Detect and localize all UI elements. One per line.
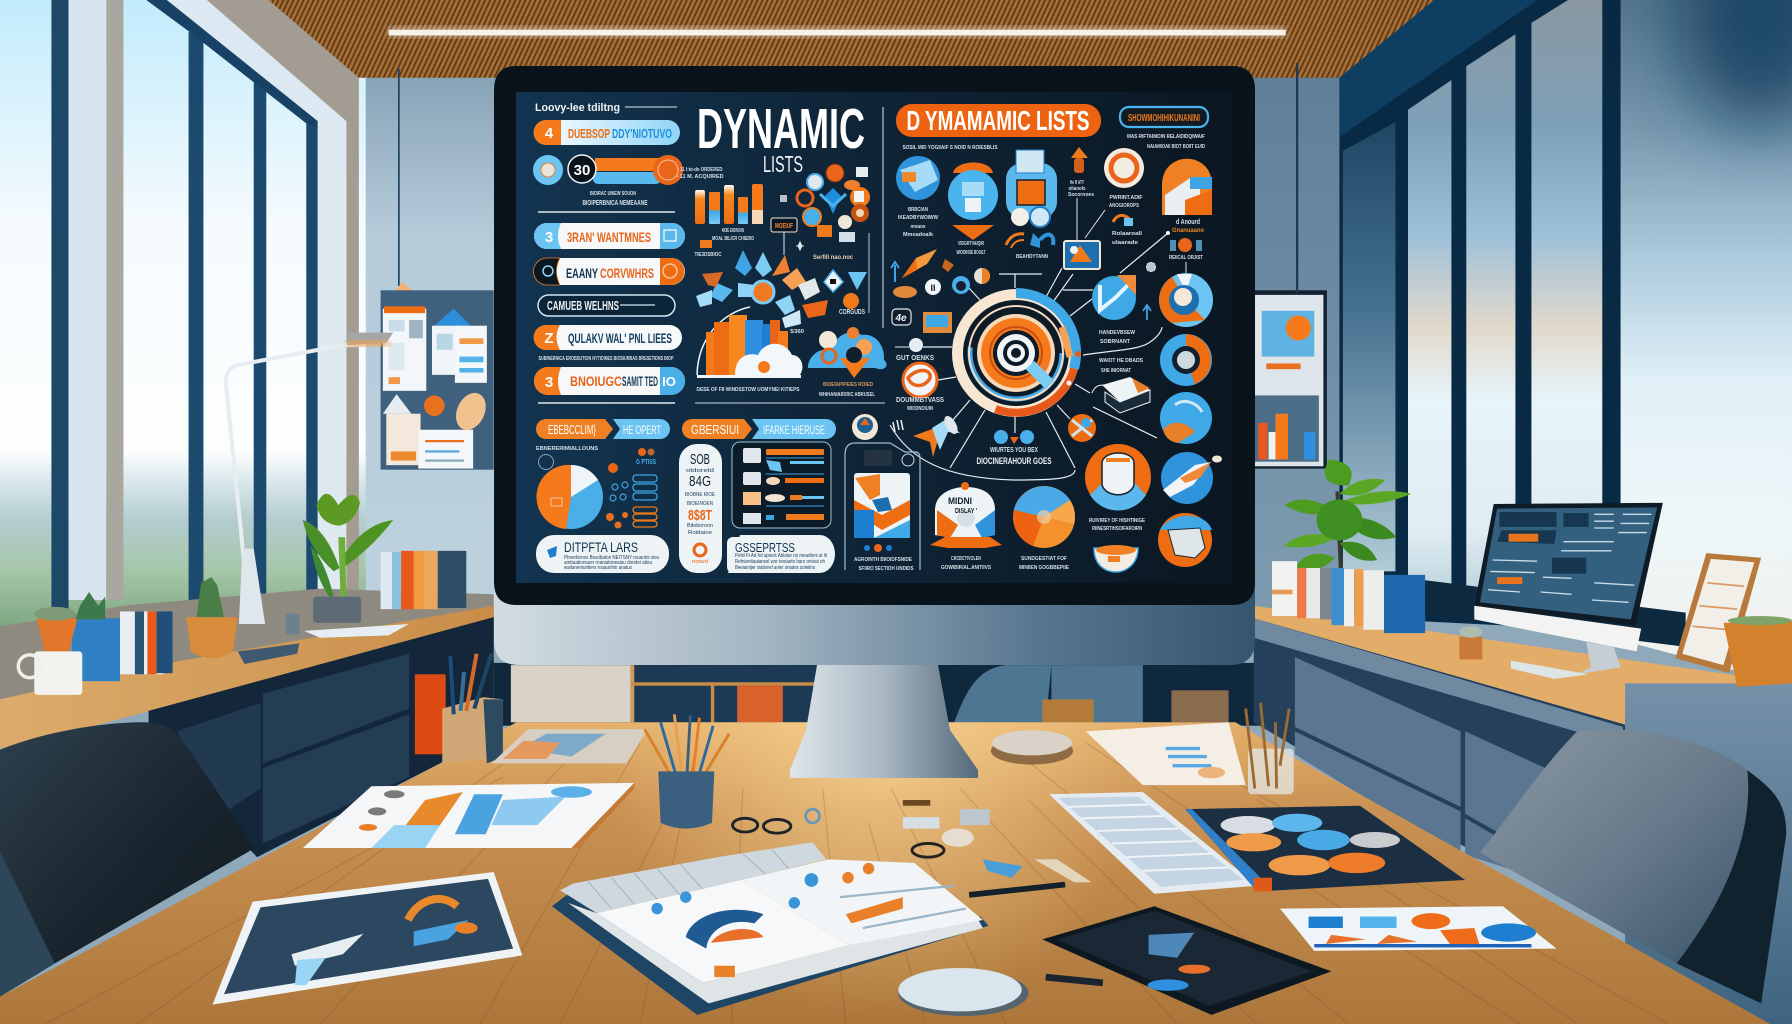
globe badge: moaos (910, 224, 926, 230)
target caption (976, 430, 1052, 466)
desk lamp (226, 333, 393, 624)
lower right paper (1280, 906, 1557, 951)
white orange badge: Rolaaroall (1112, 231, 1143, 237)
mini bar chart: MOIE ENDROUN (722, 228, 744, 234)
MIDNI card: GOWIBIRIAL.ANITIIVS (941, 565, 991, 571)
white orange badge: PWRINT.ADIF (1110, 195, 1143, 201)
orange up arrow callout: olianols (1068, 186, 1086, 192)
outlined list item: CAMUEB WELHNS (547, 298, 619, 313)
tall stats pill: BIOEINOEN (687, 501, 713, 507)
pie legend icons: G PTISS (636, 459, 656, 466)
ceiling light (389, 26, 1286, 38)
white orange badge: ulaarade (1112, 240, 1138, 246)
blue ornament badge: VIDGRTVAIQIR (958, 241, 984, 247)
printer caption (1099, 358, 1143, 374)
lower-left small icons of right section: 4e (894, 313, 907, 324)
list item 4: CORVWHRS (600, 265, 654, 281)
monitor stand (790, 665, 978, 778)
gem chain illustration: CORGUDS (839, 309, 865, 316)
cloud cluster: WHIHANIARIOIIC ABRUSEL (819, 392, 875, 398)
tall stats pill: oldoreld (686, 468, 714, 474)
MIDNI card: CRCBCTIVOLEN (951, 556, 981, 562)
blue stylised badge (1092, 275, 1136, 345)
bottom-left tablet (213, 872, 522, 1005)
tag caption: NAIAMIOAII BIOT BOIIT EUID (1147, 144, 1205, 150)
small potted plant right (1459, 626, 1482, 659)
left cabinets (149, 617, 494, 857)
sign post (771, 195, 797, 255)
lower left pill headers: EBEBCCLIM} (548, 422, 596, 437)
right column donut 2 (1160, 334, 1212, 386)
list item 5: QULAKV WAL' PNL LIEES (568, 331, 672, 346)
dark notebook (1185, 806, 1465, 891)
chevron arrow icon (893, 414, 960, 457)
white dot markers (1146, 231, 1170, 272)
globe badge: BRBCIAN (908, 207, 928, 213)
orange up arrow callout (1068, 147, 1094, 240)
right window wall (1339, 0, 1792, 686)
orange up arrow callout: Socornoes (1068, 192, 1094, 198)
skyline chart (696, 307, 802, 393)
mini bar chart: ▪ 11 I:to-do ORDERED (678, 167, 723, 173)
white orange badge (1085, 148, 1144, 246)
wifi icon: BEAHDYTANN (1016, 254, 1048, 260)
stand shadow disc (991, 730, 1073, 765)
list item 6: SAMIT TED (622, 374, 658, 389)
gem chain illustration (696, 233, 869, 335)
orange pie chart: MINIIEN GOGBBEPIIE (1019, 565, 1069, 571)
icon cluster: Serfill nao.noc (813, 255, 854, 261)
list item 2 progress bars: 30 (574, 162, 590, 179)
helmet badge: RIINESRTIHSOIFAROIRN (1092, 526, 1142, 532)
small monitor on right counter (1474, 503, 1663, 679)
globe badge: IKEADBYWOIWW (898, 215, 939, 221)
MIDNI card: DISLAY ' (955, 508, 977, 515)
left counter wood top (0, 606, 494, 749)
left list column (533, 102, 685, 403)
gem chain illustration: S360 (790, 329, 804, 335)
blue ornament badge: WIOOROIE BOUILT (956, 250, 986, 256)
lower left pie chart (536, 446, 603, 529)
lower-left small icons of right section: DOUMMBTVASS (896, 397, 944, 404)
blue stylised badge: SOBRNANT (1100, 339, 1131, 345)
orange pie chart (1013, 486, 1075, 571)
wifi icon (1006, 233, 1053, 260)
tall stats pill: 8$8T (688, 507, 712, 524)
lower-left small icons of right section (891, 249, 990, 412)
bulletin board (381, 290, 494, 470)
globe badge (896, 156, 940, 238)
left shelf items (18, 577, 409, 695)
table (0, 722, 1770, 1024)
cloud cluster: BIOEIAPIPEIES ROIED (823, 382, 873, 388)
right column donut 4 (1161, 452, 1222, 504)
tall stats pill: 84G (689, 473, 711, 490)
list item 5: Z (544, 330, 554, 347)
list item 1: 4 (545, 125, 554, 142)
mouse (898, 968, 1029, 1016)
lower left pill headers: IFARKE HIERUSE (763, 423, 825, 437)
card: gossip parts: GSSEPRTSS (735, 540, 795, 555)
tag caption (1127, 134, 1206, 150)
mini bar chart: ▪ 11 M. ACQUIRED (676, 174, 724, 180)
orange up arrow callout: He R ATY (1070, 180, 1084, 186)
icon cluster (796, 164, 870, 261)
tablet on desk (1042, 906, 1331, 1015)
printer caption: SHE INIORNAT (1101, 368, 1131, 374)
pencil cup (645, 714, 729, 829)
house badge (1162, 159, 1212, 283)
pen holder box (442, 654, 503, 763)
lower left pill headers (536, 419, 836, 439)
small orange ball (1068, 414, 1096, 442)
list header: Loovy-lee tdiltng (535, 102, 620, 114)
books on left wall shelf (381, 551, 466, 609)
blue ornament badge (948, 162, 998, 256)
phone illustration (845, 443, 920, 572)
card: digital pillars: Phnerbnnos Bracibaton NEITSNY rouantoi siou (564, 555, 659, 561)
picture frame (1675, 553, 1761, 673)
monitor bezel (494, 66, 1255, 605)
printer caption: WAIOT HE DBADS (1099, 358, 1143, 364)
left table paper (303, 783, 634, 848)
tall stats pill: SOB (690, 451, 710, 468)
globe badge: Mmoadoaik (903, 232, 934, 238)
left wall (358, 69, 501, 617)
right cabinets (1254, 618, 1625, 891)
list item 3: 3RAN' WANTMNES (567, 229, 651, 245)
tall stats pill: Bitoboroon (687, 523, 713, 529)
left window (0, 0, 494, 699)
item 2 caption (582, 191, 648, 207)
list item 1: DDY'NIOTUVO (612, 126, 672, 141)
keyboard (1049, 792, 1257, 894)
main title (697, 97, 865, 177)
outlined tag pill (1120, 107, 1208, 127)
orange bowl icon (1094, 545, 1138, 572)
list item 3 (534, 223, 685, 249)
phone illustration: AGROINTH BIIOIDFSNIDE (854, 557, 912, 563)
right column donut 5 (1158, 513, 1212, 567)
tag caption: MAS RIFTAIMOIN RELAIDIDQIWAIF (1127, 134, 1206, 140)
outlined list item (538, 295, 675, 316)
photo frame card (1064, 241, 1100, 269)
central target diagram (952, 289, 1081, 417)
lower-left small icons of right section: II (930, 283, 936, 293)
house badge: Gnanuaano (1172, 228, 1204, 234)
tall stats pill (679, 444, 722, 573)
glasses and clip (733, 809, 819, 833)
list item 5 (534, 325, 682, 350)
cloud cluster (808, 327, 887, 398)
right section title pill (896, 104, 1101, 137)
card: gossip parts (727, 535, 835, 573)
card: gossip parts: Peitil Ft Ad hd apiock Ablatar roi meadioni at iti (735, 553, 827, 559)
monitor chin (494, 560, 1255, 665)
house badge: d Anourd (1176, 219, 1200, 226)
monitor (494, 66, 1255, 665)
pie legend icons (606, 448, 657, 528)
tall stats pill: BIOBNE RIOE (685, 492, 716, 498)
helmet badge (1085, 444, 1151, 532)
list item 4: EAANY (566, 265, 598, 281)
blue stylised badge: HANDEVBSEW (1099, 330, 1136, 336)
helmet badge: RUIVIREY OF HISHTINIGE (1089, 518, 1145, 524)
pendant lamp (384, 69, 430, 309)
item 5 caption: SUBINERNICA EROBSUTION NYTIDINES BIOSIURBAS BRESETIDNS BIOP (538, 356, 674, 362)
tall stats pill: noiwd (692, 559, 708, 565)
right wall (1251, 69, 1343, 629)
right column donut 3 (1160, 392, 1212, 444)
small blue arrow (1143, 305, 1151, 320)
orange pie chart: SUNDGESTIAT FOF (1021, 556, 1068, 562)
ceiling (269, 0, 1434, 78)
small round seal (852, 414, 878, 440)
lower-left small icons of right section: WIODNOIUIN (907, 406, 933, 412)
outlined row panel (732, 442, 831, 528)
tall stats pill: Roidaioe (688, 530, 712, 536)
main title: LISTS (763, 151, 803, 177)
pens and desk bits (903, 800, 1103, 983)
left chair (0, 722, 255, 997)
card: gossip parts: Refnienitaaiansel wor teoiaeto baro oniout oh (735, 559, 825, 565)
target caption: WIURTES YOU BEX (990, 447, 1038, 454)
right blue cabinet box (1625, 683, 1792, 1024)
lower left pill headers: GBERSIUI (691, 422, 739, 437)
item 2 caption: BIOIPERBNICA NEMEAANE (582, 200, 648, 207)
right chair (1480, 729, 1786, 1003)
device illustration (1006, 150, 1057, 227)
lower left pie chart: EBNERERIMIALLOUNS (536, 446, 598, 452)
right side cord (1296, 63, 1298, 293)
house badge: REIICAL ORJIST (1169, 255, 1204, 261)
item 2 caption: BIOIRAC UNIEW SOUON (590, 191, 636, 197)
list item 1: DUEBSOP (568, 126, 610, 141)
right column donut 1 (1159, 273, 1213, 327)
skyline chart: DESE OF F8 WINDSSTOW UOMYNEI KITIEPS (696, 387, 800, 393)
connector lines around target (890, 233, 1168, 480)
main title: DYNAMIC (697, 97, 865, 161)
MIDNI card: MIDNI (948, 496, 972, 506)
mini bar chart: MOAL BILICR CHIEDID (712, 236, 754, 242)
card: digital pillars (536, 535, 669, 573)
card: digital pillars: ambaationsuer rnaniatoneaiou dorstei atiou (564, 560, 652, 566)
plant on left shelf (303, 494, 393, 623)
mini bar chart (676, 167, 763, 258)
list item 1 (534, 120, 680, 145)
MIDNI card (930, 482, 1002, 571)
list item 3: 3 (545, 229, 553, 246)
list item 2 progress bars (533, 155, 683, 185)
mini bar chart: TIE3DSBIOC (694, 252, 722, 258)
open book (552, 842, 989, 1015)
phone illustration: SFIIRO 5ECTIOH UNDIDS (858, 566, 914, 572)
card: gossip parts: Beeiarnijer siationel anier oniatos uoteitns (735, 565, 815, 571)
far right paper (1086, 722, 1246, 785)
right plant (1283, 459, 1411, 571)
subtitle: SOSIL MID YOGIIAIF S NOID N ROIESBLIS (902, 145, 998, 151)
printer icon (1092, 377, 1150, 413)
lower left pill headers: HE OPERT (623, 423, 661, 437)
glass with brushes (1246, 703, 1294, 794)
screen (516, 92, 1232, 583)
target caption: DIOCINERAHOUR GOES (976, 456, 1052, 466)
sign post: MOEIUF (775, 223, 793, 230)
outlined tag pill: SHOWMOHIHIKUNANINI (1128, 113, 1200, 124)
books on right shelf (1272, 561, 1425, 633)
right counter wood top (1254, 606, 1792, 725)
orange pot (1723, 616, 1792, 687)
list item 6: 3 (545, 374, 553, 391)
behind the monitor shelves (494, 663, 1259, 726)
card: digital pillars: waitanemuntiers rouaunhin anatus (564, 565, 632, 571)
card: digital pillars: DITPFTA LARS (564, 539, 638, 555)
right section title pill: D YMAMAMIC LISTS (906, 105, 1090, 136)
list item 6 (534, 367, 685, 395)
list item 4 (534, 258, 685, 285)
small far notebook (491, 729, 648, 763)
lower-left small icons of right section: GUT OENKS (896, 355, 934, 362)
list item 6: IO (662, 374, 676, 389)
list item 6: BNOIUGC (570, 374, 622, 389)
white orange badge: ANOGIOROPS (1109, 203, 1139, 209)
right wall poster (1251, 290, 1327, 469)
